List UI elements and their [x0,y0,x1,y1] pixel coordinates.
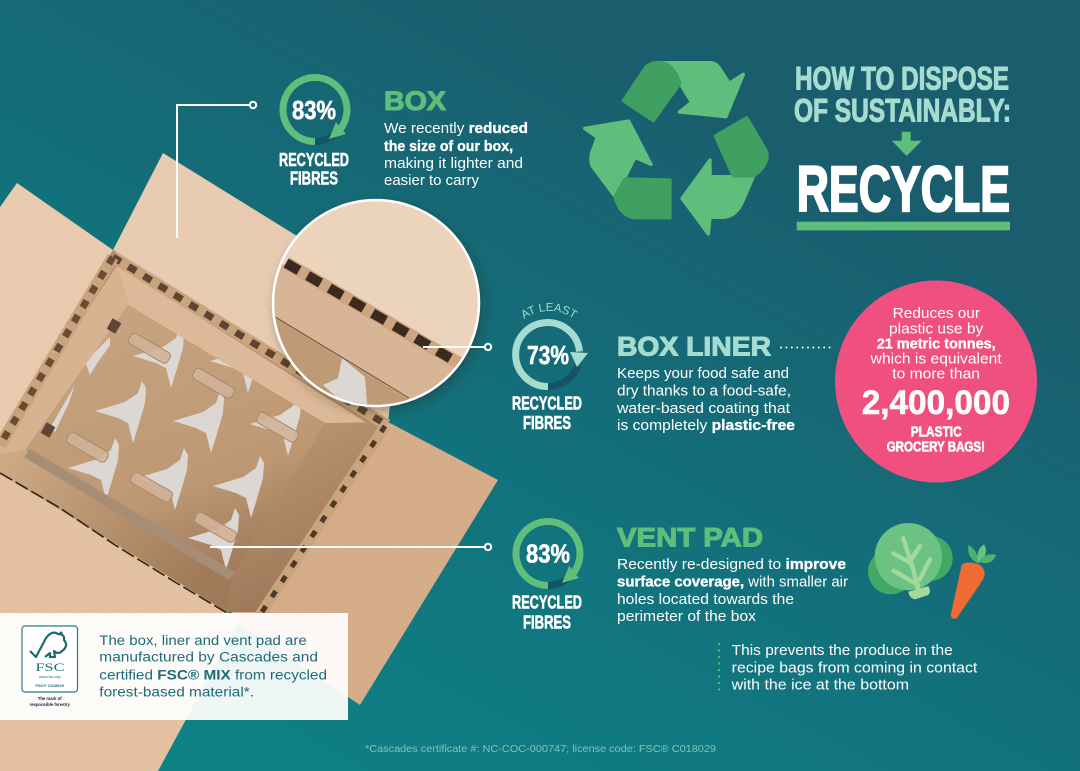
icon: FSC logo [22,626,78,707]
icon: FSC logo: FSC® C018029 [36,683,65,688]
section: box: the size of our box, [384,139,513,155]
section: vent pad: perimeter of the box [617,609,757,625]
icon: FSC logo: responsible forestry [30,702,70,707]
section: vent pad: VENT PAD [617,523,763,553]
panel: FSC certification [0,613,348,720]
footnote: *Cascades certificate #: NC-COC-000747; license code: FSC® C018029 [365,743,716,755]
section: vent pad: Recently re-designed to improve [617,557,846,573]
icon: FSC logo: The mark of [38,696,62,701]
photo: open cardboard box [0,153,498,771]
panel: FSC certification: certified FSC® MIX from recycled [99,667,327,682]
ring: vent pad 83% recycled fibres: FIBRES [523,611,571,632]
callout: plastic reduction: GROCERY BAGS! [887,439,985,456]
callout line: vent pad [210,544,491,550]
section: box: We recently reduced [384,121,528,137]
ring: vent pad 83% recycled fibres: RECYCLED [512,591,582,612]
note: produce and ice: recipe bags from coming in contact [732,660,977,676]
ring: box 83% recycled fibres [279,78,349,189]
panel: FSC certification: forest-based material*. [99,685,254,700]
callout: plastic reduction: which is equivalent [870,351,1002,367]
section: vent pad: surface coverage, with smaller air [617,575,848,591]
ring: box 83% recycled fibres: 83% [292,95,336,125]
dotted connector to pink callout [781,346,830,348]
icon: lettuce and carrot [868,523,996,619]
note: produce and ice: This prevents the produce in the [732,643,953,659]
section: box: easier to carry [384,173,480,189]
icon: FSC logo: www.fsc.org [39,674,60,679]
callout line: box liner [423,344,491,350]
section: vent pad: holes located towards the [617,592,794,608]
panel: FSC certification: The box, liner and vent pad are [99,633,307,648]
section: box [384,86,528,189]
callout: plastic reduction [835,280,1037,482]
panel: FSC certification: manufactured by Cascades and [99,650,318,665]
ring: box liner at least 73% recycled fibres [512,303,588,433]
title [794,60,1011,230]
ring: vent pad 83% recycled fibres: 83% [526,539,570,569]
section: box liner: is completely plastic-free [617,418,795,434]
callout: plastic reduction: to more than [892,366,980,382]
section: box liner: BOX LINER [617,332,771,362]
callout: plastic reduction: PLASTIC [911,424,962,441]
ring: box 83% recycled fibres: FIBRES [290,168,338,189]
section: box liner [616,332,795,434]
section: box liner: dry thanks to a food-safe, [617,384,791,400]
section: vent pad [617,523,848,625]
section: box liner: water-based coating that [616,401,790,417]
section: box: BOX [384,86,446,116]
ring: box 83% recycled fibres: RECYCLED [279,149,349,170]
section: box: making it lighter and [384,156,523,172]
magnified corrugation detail circle [270,200,480,420]
title: OF SUSTAINABLY: [794,93,1011,129]
callout: plastic reduction: 2,400,000 [862,384,1010,422]
ring: box liner at least 73% recycled fibres: FIBRES [523,412,571,433]
note: produce and ice [719,643,977,693]
note: produce and ice: with the ice at the bottom [731,677,909,693]
ring: box liner at least 73% recycled fibres: 73% [527,340,569,370]
ring: vent pad 83% recycled fibres [512,522,582,632]
callout: plastic reduction: plastic use by [889,321,984,337]
icon: FSC logo: FSC [36,660,64,674]
ring: box liner at least 73% recycled fibres: RECYCLED [512,392,582,413]
section: box liner: Keeps your food safe and [617,366,789,382]
title: HOW TO DISPOSE [795,60,1009,96]
recycling symbol [585,63,767,234]
callout line: box [177,102,256,238]
callout: plastic reduction: 21 metric tonnes, [877,336,996,352]
callout: plastic reduction: Reduces our [893,306,980,322]
ring: box liner at least 73% recycled fibres: AT LEAST [522,303,578,319]
